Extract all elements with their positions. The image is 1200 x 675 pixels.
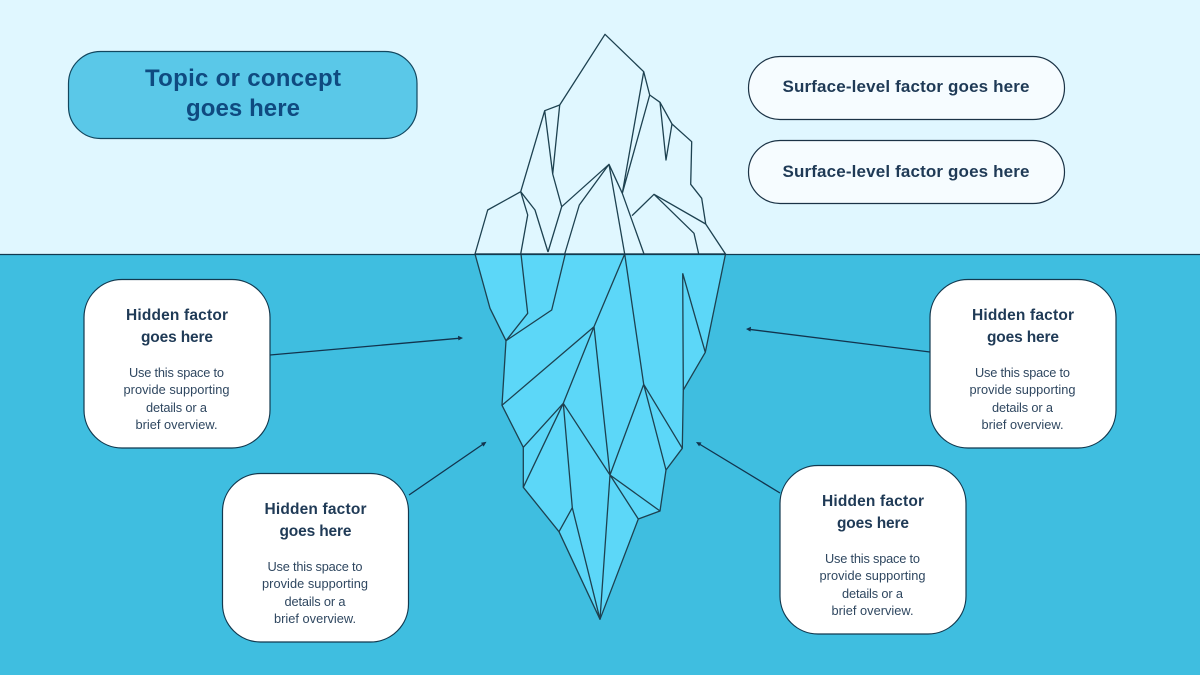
hidden factor card: lower right (780, 466, 966, 634)
hidden factor card: upper left: details or a (146, 400, 208, 415)
hidden factor card: upper left (84, 280, 270, 448)
waterline (0, 254, 1200, 256)
hidden factor card: lower right: provide supporting (820, 568, 926, 583)
sky background (0, 0, 1200, 254)
hidden factor card: upper left: goes here (141, 329, 213, 346)
surface factor pill 1 (748, 56, 1064, 120)
surface factor pill 2 (748, 140, 1064, 204)
hidden factor card: upper left: Hidden factor (126, 307, 228, 324)
title pill: Topic or concept (145, 65, 341, 92)
hidden factor card: lower right: details or a (842, 586, 904, 601)
surface factor pill 2: Surface-level factor goes here (782, 162, 1030, 181)
hidden factor card: upper left: provide supporting (124, 382, 230, 397)
hidden factor card: upper right: goes here (987, 329, 1059, 346)
hidden factor card: upper right: details or a (992, 400, 1054, 415)
hidden factor card: lower right: Hidden factor (822, 493, 924, 510)
hidden factor card: upper right: provide supporting (970, 382, 1076, 397)
hidden factor card: lower right: Use this space to (825, 551, 920, 566)
hidden factor card: lower left: brief overview. (274, 611, 356, 626)
title pill: goes here (186, 95, 300, 122)
arrow: lower left (409, 442, 486, 495)
water background (0, 254, 1200, 675)
hidden factor card: lower right: brief overview. (832, 603, 914, 618)
hidden factor card: upper right: Hidden factor (972, 307, 1074, 324)
hidden factor card: lower left: provide supporting (262, 576, 368, 591)
surface factor pill 1: Surface-level factor goes here (782, 77, 1030, 96)
iceberg above the water (475, 34, 726, 254)
hidden factor card: lower left: Hidden factor (264, 501, 366, 518)
hidden factor card: lower left: Use this space to (268, 559, 362, 574)
hidden factor card: lower left: goes here (280, 523, 352, 540)
hidden factor card: lower left (222, 474, 408, 642)
hidden factor card: upper right (930, 280, 1116, 448)
arrow: lower right (696, 442, 780, 493)
title pill (68, 52, 417, 138)
hidden factor card: upper right: Use this space to (975, 365, 1070, 380)
iceberg (475, 34, 726, 619)
arrow: upper left (270, 336, 463, 355)
hidden factor card: upper left: Use this space to (129, 365, 224, 380)
iceberg below the water (475, 254, 726, 619)
arrow: upper right (746, 327, 930, 352)
hidden factor card: upper right: brief overview. (982, 417, 1064, 432)
hidden factor card: lower right: goes here (837, 515, 909, 532)
hidden factor card: upper left: brief overview. (136, 417, 218, 432)
hidden factor card: lower left: details or a (284, 594, 346, 609)
